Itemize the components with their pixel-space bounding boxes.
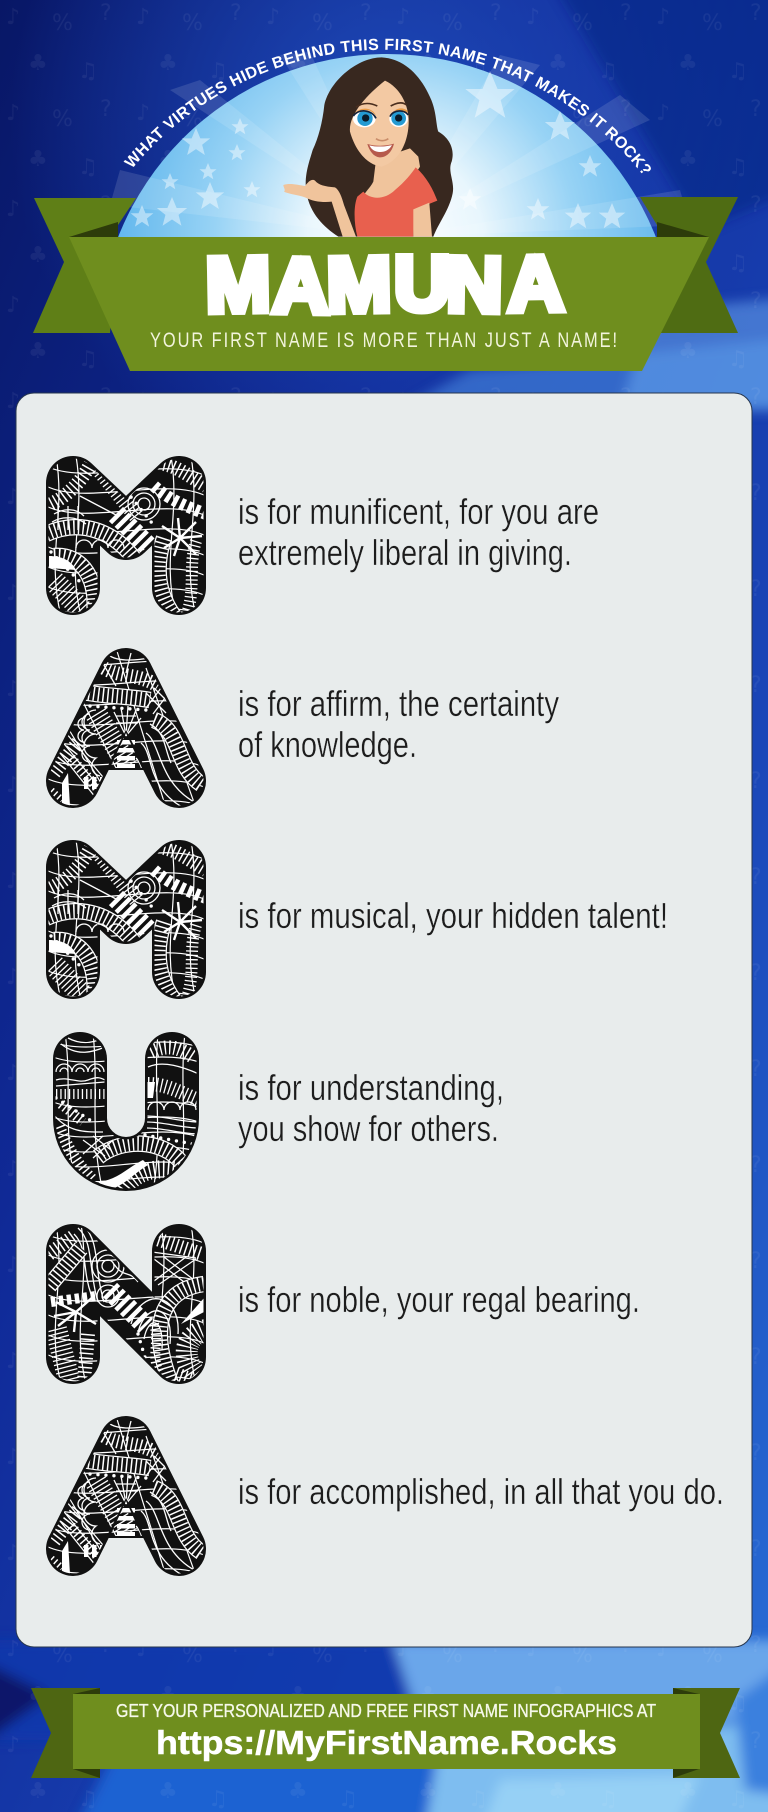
text: A line	[238, 683, 559, 765]
character: woman	[283, 57, 453, 237]
eyes	[353, 110, 408, 127]
left ribbon tail	[33, 198, 136, 333]
sun rays	[110, 52, 690, 237]
text: A line: of knowledge.	[238, 724, 417, 765]
text: M line: extremely liberal in giving.	[238, 532, 572, 573]
text: A line: is for affirm, the certainty	[238, 683, 559, 724]
text: M line: is for musical, your hidden talent!	[238, 895, 668, 936]
letter N	[46, 1224, 206, 1384]
banner subtitle: YOUR FIRST NAME IS MORE THAN JUST A NAME!	[150, 329, 619, 352]
footer folds	[73, 1688, 699, 1778]
letter A	[46, 1416, 206, 1576]
header dome with star burst	[112, 52, 682, 237]
footer call to action: GET YOUR PERSONALIZED AND FREE FIRST NAME INFOGRAPHICS AT	[116, 1700, 656, 1721]
stars	[131, 71, 625, 228]
red top	[355, 167, 437, 237]
face	[350, 81, 409, 167]
right ribbon tail	[640, 197, 738, 333]
text: M line	[238, 491, 599, 573]
letter M	[46, 456, 206, 616]
eye shadow and brows	[355, 108, 407, 115]
footer band	[73, 1694, 700, 1769]
text: M line: is for munificent, for you are	[238, 491, 599, 532]
text: U line: you show for others.	[238, 1108, 499, 1149]
text: N line: is for noble, your regal bearing.	[238, 1279, 640, 1320]
footer ribbon	[31, 1688, 740, 1778]
mouth	[367, 144, 394, 157]
footer left tail	[31, 1688, 100, 1778]
letter M	[46, 840, 206, 1000]
right arm	[413, 203, 432, 237]
arched tagline: WHAT VIRTUES HIDE BEHIND THIS FIRST NAME THAT MAKES IT ROCK?	[124, 38, 651, 174]
letter U	[53, 1032, 199, 1192]
hair	[306, 57, 453, 237]
neck and chest	[363, 148, 420, 203]
footer right tail	[673, 1688, 740, 1778]
text: U line	[238, 1067, 504, 1149]
main panel	[16, 393, 752, 1647]
left arm and hand	[283, 180, 356, 237]
nose	[376, 139, 388, 141]
text: U line: is for understanding,	[238, 1067, 504, 1108]
footer url: https://MyFirstName.Rocks	[156, 1724, 617, 1761]
letter A	[46, 648, 206, 808]
name title: MAMUNA	[205, 239, 565, 330]
main green banner	[69, 237, 709, 371]
right ribbon fold	[657, 222, 709, 237]
left ribbon fold	[69, 222, 118, 237]
